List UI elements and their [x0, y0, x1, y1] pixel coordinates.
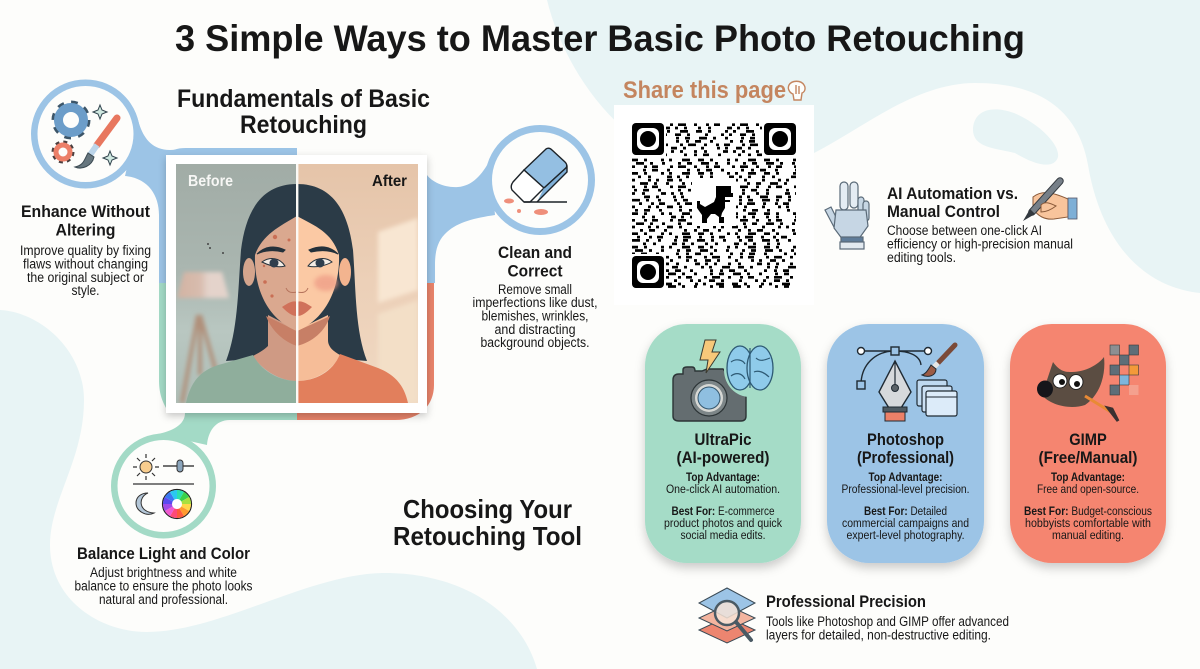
heading: fundamentals: Fundamentals of Basic — [177, 85, 430, 113]
portrait: shirt right — [297, 354, 408, 403]
heading: fundamentals — [177, 85, 430, 139]
text: GIMP details: Best For: Budget-conscious — [1024, 504, 1152, 518]
text: enhance without altering: style. — [72, 283, 100, 298]
heading: Photoshop: (Professional) — [857, 448, 954, 467]
panel: enhance without altering — [20, 80, 151, 298]
text: GIMP details — [1024, 470, 1152, 542]
icon ring: eraser — [485, 125, 595, 235]
icon: dinosaur — [697, 186, 733, 223]
icon: pointing hand — [788, 81, 805, 100]
portrait: brows — [257, 247, 338, 254]
QR finder: top right — [764, 123, 796, 155]
text: UltraPic details: One-click AI automation. — [666, 482, 780, 496]
portrait: blemishes — [263, 235, 290, 298]
heading: GIMP: (Free/Manual) — [1038, 448, 1138, 467]
text: clean and correct: and distracting — [494, 322, 576, 337]
heading: Photoshop — [857, 430, 954, 467]
text: GIMP details: Top Advantage: — [1051, 470, 1125, 484]
portrait: ears — [243, 258, 351, 286]
portrait: hair — [226, 184, 367, 361]
text: enhance without altering: Improve quality by fixing — [20, 243, 151, 258]
text: clean and correct: background objects. — [480, 335, 590, 350]
heading: AI automation vs manual control: Manual Control — [887, 202, 1000, 221]
text: enhance without altering: the original subject or — [27, 270, 144, 285]
portrait: neck right — [297, 315, 340, 381]
photo background: before side — [176, 164, 297, 403]
text: UltraPic details: Top Advantage: — [686, 470, 760, 484]
text: balance light and color: balance to ensure the photo looks — [74, 578, 253, 594]
icon ring: sun, moon and color wheel — [111, 434, 216, 538]
portrait: blush — [314, 275, 338, 291]
portrait: shirt left — [186, 355, 297, 403]
text: clean and correct — [472, 282, 598, 350]
heading: GIMP: GIMP — [1069, 430, 1107, 449]
panel: Photoshop card — [827, 324, 984, 563]
heading: clean and correct: Clean and — [498, 243, 572, 262]
panel: share QR code — [614, 77, 814, 305]
text: UltraPic details: social media edits. — [680, 528, 766, 542]
text: enhance without altering — [20, 243, 151, 298]
photo background: after side — [297, 164, 418, 403]
connector shapes behind photo — [125, 120, 495, 445]
heading: professional precision: Professional Precision — [766, 592, 926, 611]
text: Photoshop details: Professional-level precision. — [842, 482, 970, 496]
icon: camera with brain — [673, 340, 776, 421]
text: AI automation vs manual control — [887, 223, 1073, 265]
portrait: lips — [282, 301, 312, 316]
icon: hand with pen — [1023, 181, 1077, 221]
text: Photoshop details: commercial campaigns and — [842, 516, 969, 530]
text: GIMP details: hobbyists comfortable with — [1025, 516, 1151, 530]
panel: clean and correct — [472, 125, 598, 350]
heading: fundamentals: Retouching — [240, 111, 367, 139]
text: AI automation vs manual control: editing tools. — [887, 250, 956, 265]
text: enhance without altering: flaws without changing — [23, 256, 148, 272]
text: AI automation vs manual control: Choose between one-click AI — [887, 223, 1042, 238]
panel: before and after photo — [166, 155, 427, 413]
heading: clean and correct — [498, 243, 572, 280]
QR finder: bottom left — [632, 256, 664, 288]
icon ring: gears and brush — [31, 80, 140, 188]
title: 3 Simple Ways to Master Basic Photo Retouching — [175, 18, 1025, 59]
portrait: divider — [296, 164, 298, 403]
icon: GIMP mascot and pixels — [1037, 345, 1138, 421]
heading: choosing your retouching tool — [393, 494, 582, 551]
panel: balance light and color — [74, 434, 253, 607]
text: GIMP details: Free and open-source. — [1037, 482, 1139, 496]
panel: AI automation vs manual control — [825, 181, 1077, 265]
portrait: neck left — [253, 315, 297, 381]
heading: enhance without altering — [21, 202, 150, 240]
text: AI automation vs manual control: efficiency or high-precision manual — [887, 236, 1073, 252]
text: Photoshop details: Top Advantage: — [868, 470, 942, 484]
text: balance light and color: natural and professional. — [99, 592, 228, 607]
panel: professional precision — [699, 588, 1009, 643]
QR finder: top left — [632, 123, 664, 155]
portrait: chin shadow — [266, 316, 330, 346]
text: professional precision — [766, 614, 1009, 642]
text: GIMP details: manual editing. — [1052, 528, 1124, 542]
text: clean and correct: imperfections like dust, — [472, 295, 598, 310]
portrait: nose — [286, 288, 308, 293]
portrait: face right — [297, 216, 339, 331]
text: clean and correct: Remove small — [498, 282, 572, 297]
heading: clean and correct: Correct — [508, 262, 563, 280]
portrait: face left — [255, 216, 297, 331]
icon: robot hand — [825, 182, 869, 249]
text: professional precision: Tools like Photoshop and GIMP offer advanced — [766, 614, 1009, 629]
text: balance light and color — [74, 565, 253, 607]
heading: enhance without altering: Altering — [56, 220, 116, 240]
heading: Photoshop: Photoshop — [867, 430, 944, 449]
photo label: before: Before — [188, 173, 233, 190]
QR code — [622, 119, 807, 294]
text: Photoshop details: expert-level photography. — [846, 528, 964, 542]
heading: UltraPic — [676, 430, 770, 467]
photo label: after: After — [372, 173, 407, 190]
heading: choosing your retouching tool: Retouching Tool — [393, 521, 582, 551]
text: clean and correct: blemishes, wrinkles, — [482, 308, 588, 324]
text: professional precision: layers for detailed, non-destructive editing. — [766, 628, 991, 642]
text: UltraPic details: Best For: E-commerce — [672, 504, 775, 518]
heading: AI automation vs manual control: AI Automation vs. — [887, 184, 1018, 203]
heading: UltraPic: (AI-powered) — [676, 448, 770, 467]
heading: choosing your retouching tool: Choosing Your — [403, 494, 572, 524]
panel: GIMP card — [1010, 324, 1166, 563]
text: UltraPic details: product photos and quick — [664, 516, 783, 530]
text: Photoshop details — [842, 470, 970, 542]
heading: share this page: Share this page — [623, 77, 786, 104]
icon: pen tool, brush and windows — [857, 345, 957, 421]
text: balance light and color: Adjust brightness and white — [90, 565, 237, 580]
heading: UltraPic: UltraPic — [694, 430, 752, 449]
text: Photoshop details: Best For: Detailed — [864, 504, 947, 518]
heading: GIMP — [1038, 430, 1138, 467]
heading: AI automation vs manual control — [887, 184, 1018, 221]
QR background — [614, 105, 814, 305]
heading: enhance without altering: Enhance Without — [21, 202, 150, 221]
heading: balance light and color: Balance Light and Color — [77, 544, 250, 563]
portrait: eyes — [262, 258, 332, 268]
icon: layers with magnifier — [699, 588, 755, 643]
text: UltraPic details — [664, 470, 783, 542]
panel: UltraPic card — [645, 324, 801, 563]
